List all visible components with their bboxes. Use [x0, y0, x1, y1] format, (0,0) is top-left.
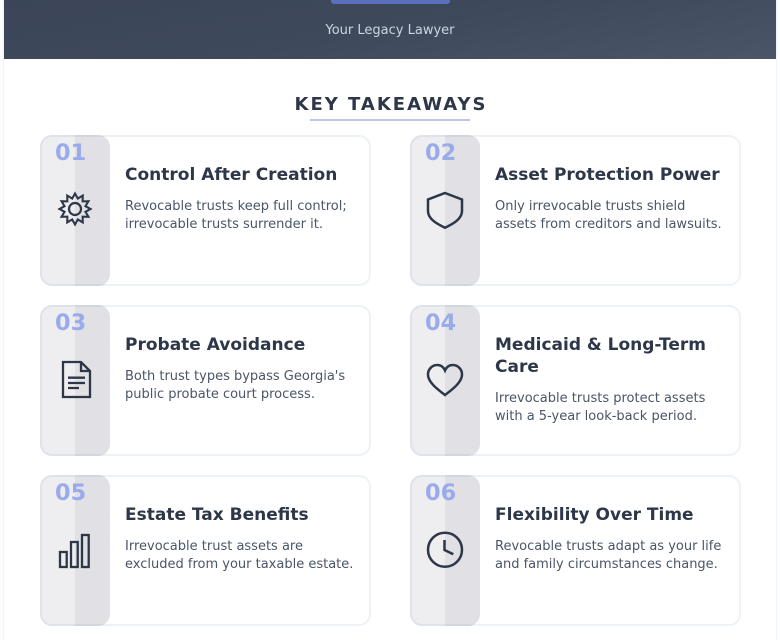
number and icon column: [40, 135, 110, 286]
number 04: 04: [425, 310, 456, 336]
card text: Revocable trusts adapt as your life: [495, 539, 721, 554]
number and icon column: [410, 305, 480, 456]
card heading: Flexibility Over Time: [495, 505, 694, 525]
card text: Irrevocable trust assets are: [125, 539, 303, 554]
title underline: [310, 119, 470, 121]
card heading: [495, 335, 706, 377]
tagline: Your Legacy Lawyer: [326, 23, 454, 38]
number and icon column: [410, 475, 480, 626]
panel: card 03 probate avoidance: [40, 305, 371, 456]
number 03: 03: [55, 310, 86, 336]
icon: gear: [58, 192, 92, 226]
card heading: Estate Tax Benefits: [125, 505, 309, 525]
card text: Only irrevocable trusts shield: [495, 199, 685, 214]
card text: with a 5-year look-back period.: [495, 409, 697, 424]
panel: card 06 flexibility over time: [410, 475, 741, 626]
icon: shield: [426, 192, 464, 229]
icon: heart: [426, 364, 464, 396]
card text: [125, 369, 345, 402]
icon: bar chart: [58, 534, 90, 568]
card heading: Probate Avoidance: [125, 335, 305, 355]
card text: irrevocable trusts surrender it.: [125, 217, 323, 232]
card text: Irrevocable trusts protect assets: [495, 391, 705, 406]
panel: card 05 estate tax benefits: [40, 475, 371, 626]
card text: public probate court process.: [125, 387, 315, 402]
number 01: 01: [55, 140, 86, 166]
card text: and family circumstances change.: [495, 557, 718, 572]
number and icon column: [40, 475, 110, 626]
icon: clock: [426, 532, 464, 568]
card heading: Care: [495, 357, 539, 377]
number 05: 05: [55, 480, 86, 506]
card text: [125, 539, 353, 572]
card heading: Control After Creation: [125, 165, 337, 185]
icon: document: [62, 360, 92, 398]
card text: excluded from your taxable estate.: [125, 557, 353, 572]
panel: card 02 asset protection power: [410, 135, 741, 286]
number and icon column: [410, 135, 480, 286]
panel: card 01 control after creation: [40, 135, 371, 286]
card heading: Asset Protection Power: [495, 165, 720, 185]
card text: [495, 391, 705, 424]
number and icon column: [40, 305, 110, 456]
number 02: 02: [425, 140, 456, 166]
card text: [125, 199, 347, 232]
number 06: 06: [425, 480, 456, 506]
card text: [495, 199, 722, 232]
card text: [495, 539, 721, 572]
card heading: Medicaid & Long-Term: [495, 335, 706, 355]
header banner: [4, 0, 776, 59]
card text: Revocable trusts keep full control;: [125, 199, 347, 214]
accent bar: [331, 0, 450, 4]
card text: Both trust types bypass Georgia's: [125, 369, 345, 384]
card text: assets from creditors and lawsuits.: [495, 217, 722, 232]
panel: card 04 medicaid and long-term care: [410, 305, 741, 456]
title: KEY TAKEAWAYS: [294, 94, 487, 115]
